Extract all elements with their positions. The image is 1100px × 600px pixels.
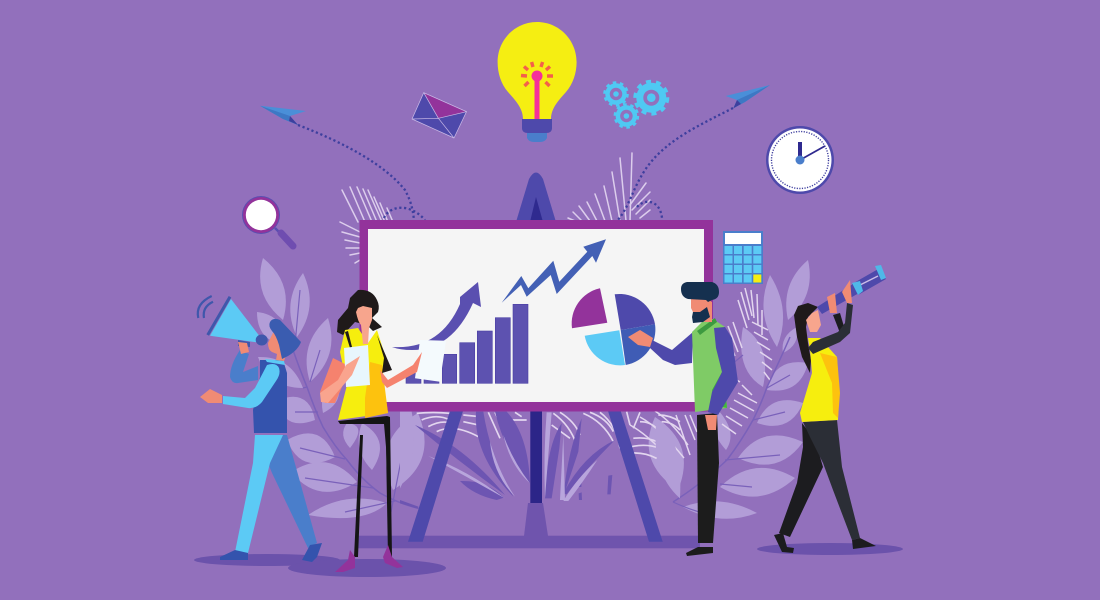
raised paper — [415, 340, 446, 382]
person: presenting man — [628, 282, 738, 556]
palm frond: top right — [568, 153, 650, 221]
front arm — [223, 364, 280, 408]
far forearm — [833, 313, 845, 333]
curved growth arrow — [392, 282, 481, 350]
person: woman with papers — [320, 290, 446, 572]
vest — [692, 319, 727, 412]
easel base — [358, 536, 700, 548]
board — [360, 220, 713, 412]
megaphone — [210, 299, 260, 342]
sound waves — [198, 296, 213, 318]
shirt — [338, 328, 388, 420]
right plant — [630, 260, 810, 519]
light bulb — [498, 22, 577, 142]
floor shadows — [194, 543, 903, 577]
easel top — [516, 172, 556, 222]
magnifying glass — [242, 196, 293, 246]
straps — [345, 331, 392, 373]
easel pole — [530, 411, 542, 503]
left arm — [320, 358, 347, 403]
pointing hand — [200, 389, 222, 403]
back leg — [779, 423, 823, 537]
legs — [338, 416, 392, 557]
legs — [268, 435, 317, 548]
left plant — [257, 258, 425, 518]
person: woman with telescope — [774, 265, 886, 553]
sleeve — [708, 327, 738, 415]
zigzag growth arrow — [502, 239, 606, 303]
shoes — [335, 545, 403, 572]
calculator — [723, 231, 763, 284]
collar — [265, 359, 285, 365]
right arm — [380, 352, 422, 388]
palm frond: top left — [340, 187, 393, 263]
envelope — [412, 93, 466, 138]
paper plane: right — [726, 85, 770, 108]
person: man with megaphone — [198, 296, 322, 562]
pants — [697, 413, 719, 543]
easel legs — [408, 411, 663, 542]
front leg — [803, 420, 860, 540]
paper plane: left — [260, 106, 306, 125]
dotted flight paths — [298, 108, 733, 220]
hair — [794, 303, 818, 373]
paper held — [344, 345, 370, 387]
head — [691, 299, 712, 322]
pie chart — [572, 288, 655, 365]
gears — [605, 82, 667, 127]
easel — [358, 172, 700, 548]
shoes — [220, 543, 322, 562]
shirt — [800, 338, 839, 422]
palm fronds and leaves below the board — [400, 412, 680, 509]
hands — [827, 280, 852, 313]
bar chart — [406, 304, 528, 383]
pointing arm — [650, 332, 693, 365]
lower hand — [705, 415, 717, 430]
face — [806, 310, 821, 332]
face — [356, 306, 372, 344]
shoes — [774, 533, 876, 553]
hair — [337, 290, 382, 335]
clock — [766, 126, 834, 194]
sleeve — [808, 303, 853, 354]
pointing hand — [628, 330, 653, 347]
telescope — [817, 265, 886, 314]
back arm — [230, 350, 258, 383]
head — [268, 331, 288, 361]
vest — [253, 360, 287, 433]
